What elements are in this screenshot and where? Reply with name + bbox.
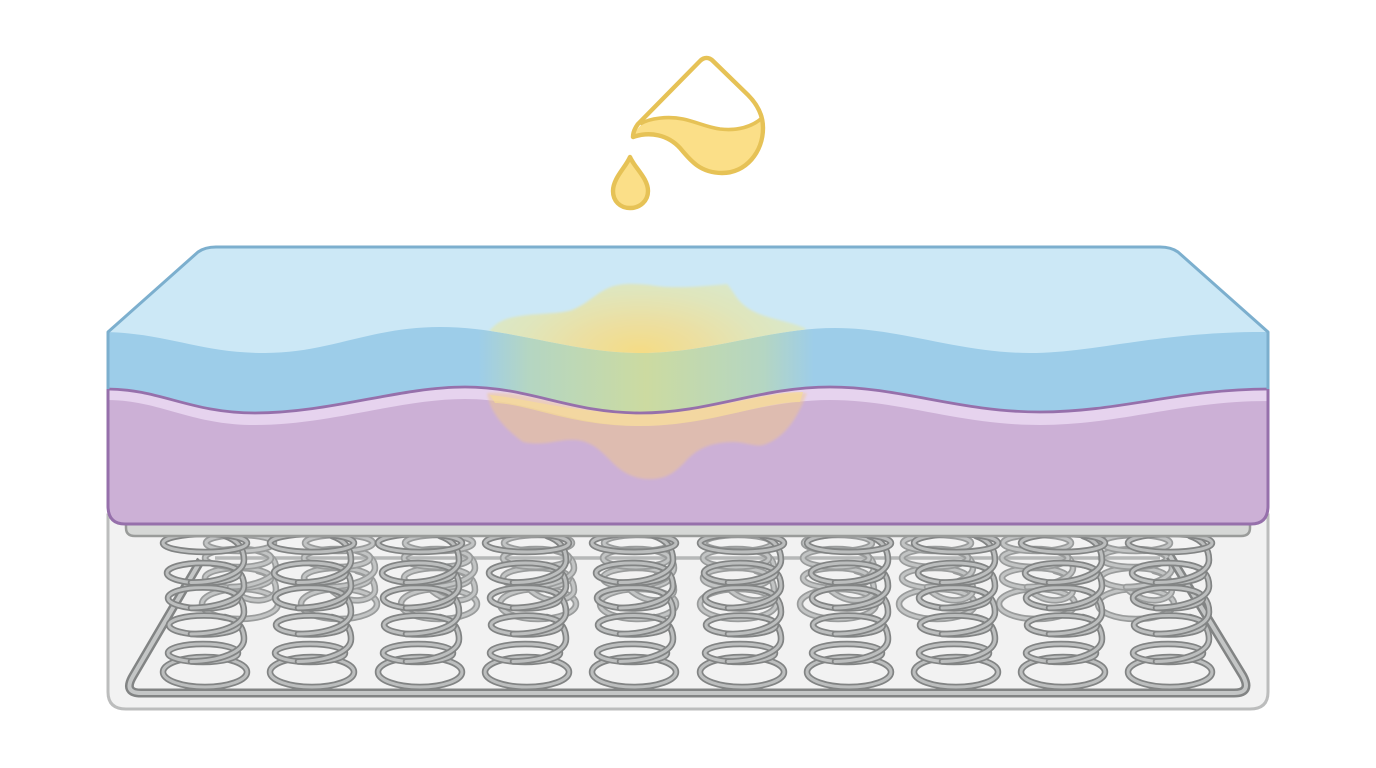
panel: mattress layers <box>107 246 1269 524</box>
back row of springs <box>202 535 1174 619</box>
layer divider line <box>107 387 1269 413</box>
liquid surface line <box>640 118 762 130</box>
lower layer outline <box>108 389 1268 524</box>
mid blue foam layer <box>107 320 1269 413</box>
icon: pouring liquid vessel with drop <box>613 58 763 208</box>
back frame line <box>215 556 1160 560</box>
stain on blue layer <box>489 330 804 412</box>
panel: spring base <box>108 515 1268 709</box>
vessel liquid <box>633 118 763 173</box>
wire frame <box>129 556 1246 693</box>
icon: falling drop <box>613 157 648 208</box>
top layer outline <box>108 247 1268 389</box>
front row of springs <box>163 534 1212 687</box>
base enclosure <box>108 515 1268 709</box>
vessel outline <box>633 58 763 173</box>
light band under layer line <box>107 387 1269 426</box>
stain in light band <box>490 392 803 426</box>
support platform <box>126 518 1250 536</box>
stain on top surface <box>490 284 805 360</box>
lower purple foam layer <box>107 387 1269 524</box>
stain in purple layer <box>487 393 807 479</box>
top quilted surface <box>107 246 1269 353</box>
